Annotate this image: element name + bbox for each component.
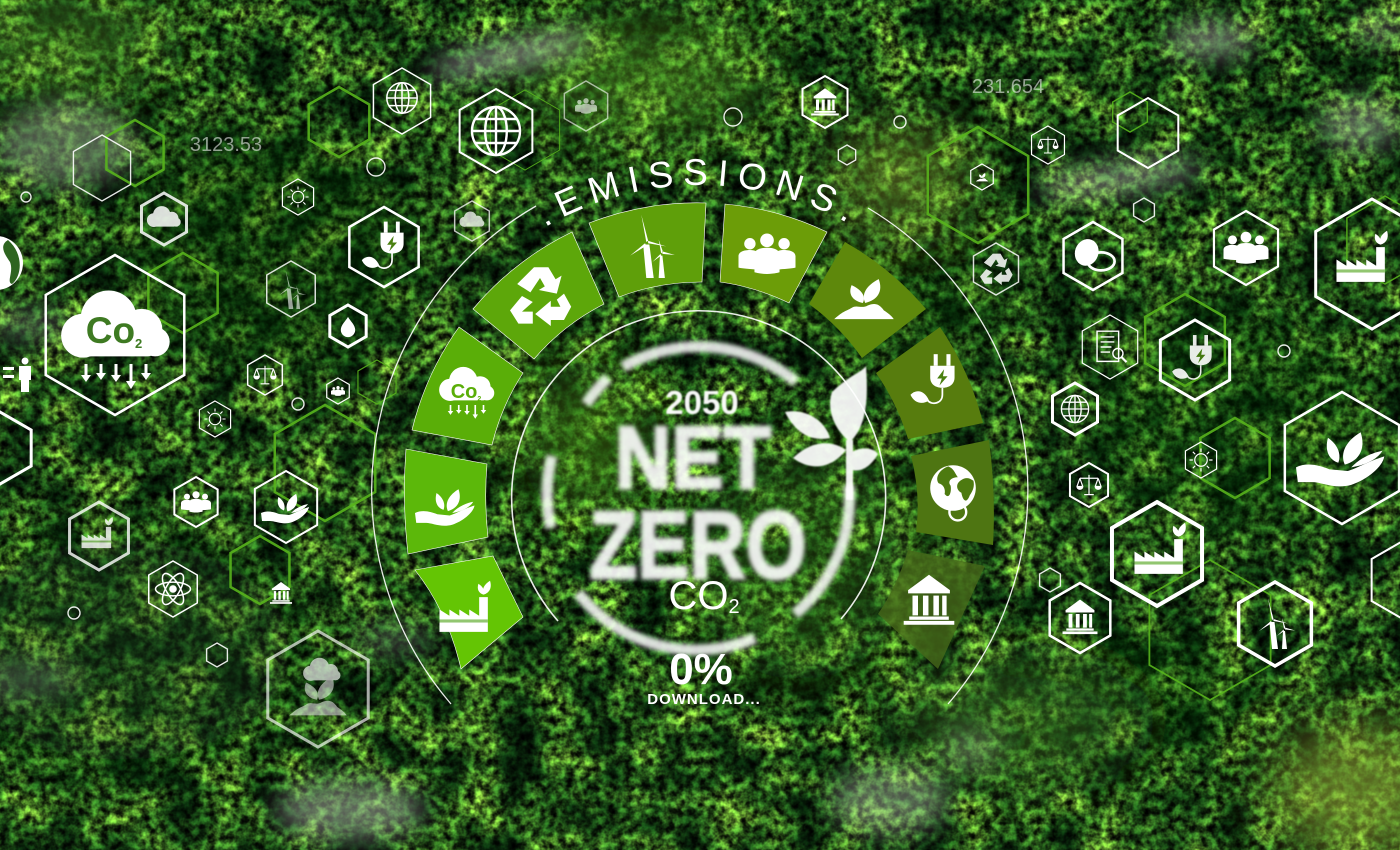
icon: person with arrows bbox=[3, 358, 31, 392]
small hexagons and circles bbox=[21, 108, 1290, 667]
hex: scale bbox=[248, 355, 282, 395]
hex: CO2 cloud large: 2 bbox=[135, 336, 142, 351]
hex: people lower left bbox=[174, 477, 218, 527]
hex: scale top right bbox=[1032, 126, 1064, 164]
hex: people small bbox=[327, 378, 349, 404]
hex: sun right bbox=[1185, 442, 1217, 478]
plant icon bbox=[785, 366, 878, 500]
hex: plug bbox=[349, 207, 419, 287]
floating number left: 3123.53 bbox=[190, 134, 262, 156]
hex: faded top bbox=[564, 81, 608, 131]
hex: recycle faded bbox=[973, 243, 1019, 295]
tile: recycle bbox=[473, 232, 604, 359]
hex: factory faded bbox=[70, 502, 128, 570]
outer and inner rings bbox=[372, 206, 1028, 704]
zero percent: 0% bbox=[669, 645, 733, 694]
tile: globe bbox=[911, 440, 994, 545]
hex: CO2 cloud large: Co bbox=[86, 310, 135, 351]
panel: ten arc tiles bbox=[404, 203, 994, 669]
NET: NET bbox=[615, 408, 771, 507]
hex: hand bbox=[255, 471, 317, 543]
tile: plug bbox=[876, 327, 983, 439]
tile: people bbox=[720, 204, 827, 303]
hex: factory lower right bbox=[1112, 502, 1202, 606]
tile: wind turbines bbox=[589, 203, 706, 297]
tile: CO2 cloud bbox=[412, 327, 523, 445]
hex: bank lower right bbox=[1050, 583, 1110, 653]
hex: atom bbox=[149, 561, 197, 617]
icon: bank small bbox=[270, 582, 292, 604]
hex: bank top bbox=[802, 76, 848, 128]
year: 2050 bbox=[665, 384, 739, 421]
hex: people right bbox=[1214, 211, 1278, 285]
CO2 label: 2 bbox=[728, 596, 740, 618]
hex: wire globe right bbox=[1052, 383, 1098, 435]
tile: CO2 cloud: 2 bbox=[477, 396, 481, 403]
ZERO: ZERO bbox=[590, 492, 806, 599]
download label: DOWNLOAD... bbox=[647, 691, 761, 708]
hex: water drop bbox=[330, 305, 366, 347]
hex: plug right bbox=[1160, 320, 1230, 400]
hex: turbine right bbox=[1239, 582, 1311, 666]
curved title: emissions: .EMISSIONS. bbox=[511, 158, 846, 274]
hex: sun top bbox=[282, 179, 314, 215]
centre badge: net zero bbox=[547, 347, 878, 708]
hex: factory large right bbox=[1316, 199, 1400, 329]
hex: hand right bbox=[1285, 392, 1399, 524]
icon: globe left edge bbox=[0, 236, 23, 290]
tile: CO2 cloud: Co bbox=[451, 381, 477, 403]
hex: scale right bbox=[1070, 463, 1108, 507]
hex: cloud faded bbox=[141, 193, 187, 245]
hex: CO2 cloud large bbox=[46, 255, 184, 415]
hex: document search bbox=[1082, 315, 1138, 379]
hex: globe with leaf bbox=[373, 68, 431, 134]
curved title: emissions bbox=[511, 158, 846, 274]
tile: bank bbox=[878, 550, 985, 669]
hex: coins bbox=[1064, 222, 1122, 290]
left icon hexagons bbox=[0, 68, 608, 747]
tile: hand and leaves bbox=[404, 449, 488, 554]
hex: empty top right bbox=[1118, 98, 1178, 168]
hex: small sprout bbox=[971, 164, 993, 190]
tile: factory bbox=[415, 556, 523, 669]
broken blurred ring bbox=[547, 347, 850, 650]
green accent hexagons bbox=[106, 87, 1400, 700]
hex: wire globe bbox=[460, 89, 532, 173]
hex: sun lower bbox=[199, 401, 231, 437]
hex: turbine faded bbox=[267, 261, 315, 317]
hex: right edge bbox=[1372, 538, 1400, 622]
hex: cloud faded bottom bbox=[268, 631, 368, 747]
right icon hexagons bbox=[802, 76, 1400, 666]
tile: sprout bbox=[809, 242, 926, 358]
hex: left edge bbox=[0, 412, 31, 484]
floating number right: 231.654 bbox=[972, 76, 1044, 98]
CO2 label: CO bbox=[668, 574, 728, 618]
hex: faded small bbox=[455, 201, 489, 241]
